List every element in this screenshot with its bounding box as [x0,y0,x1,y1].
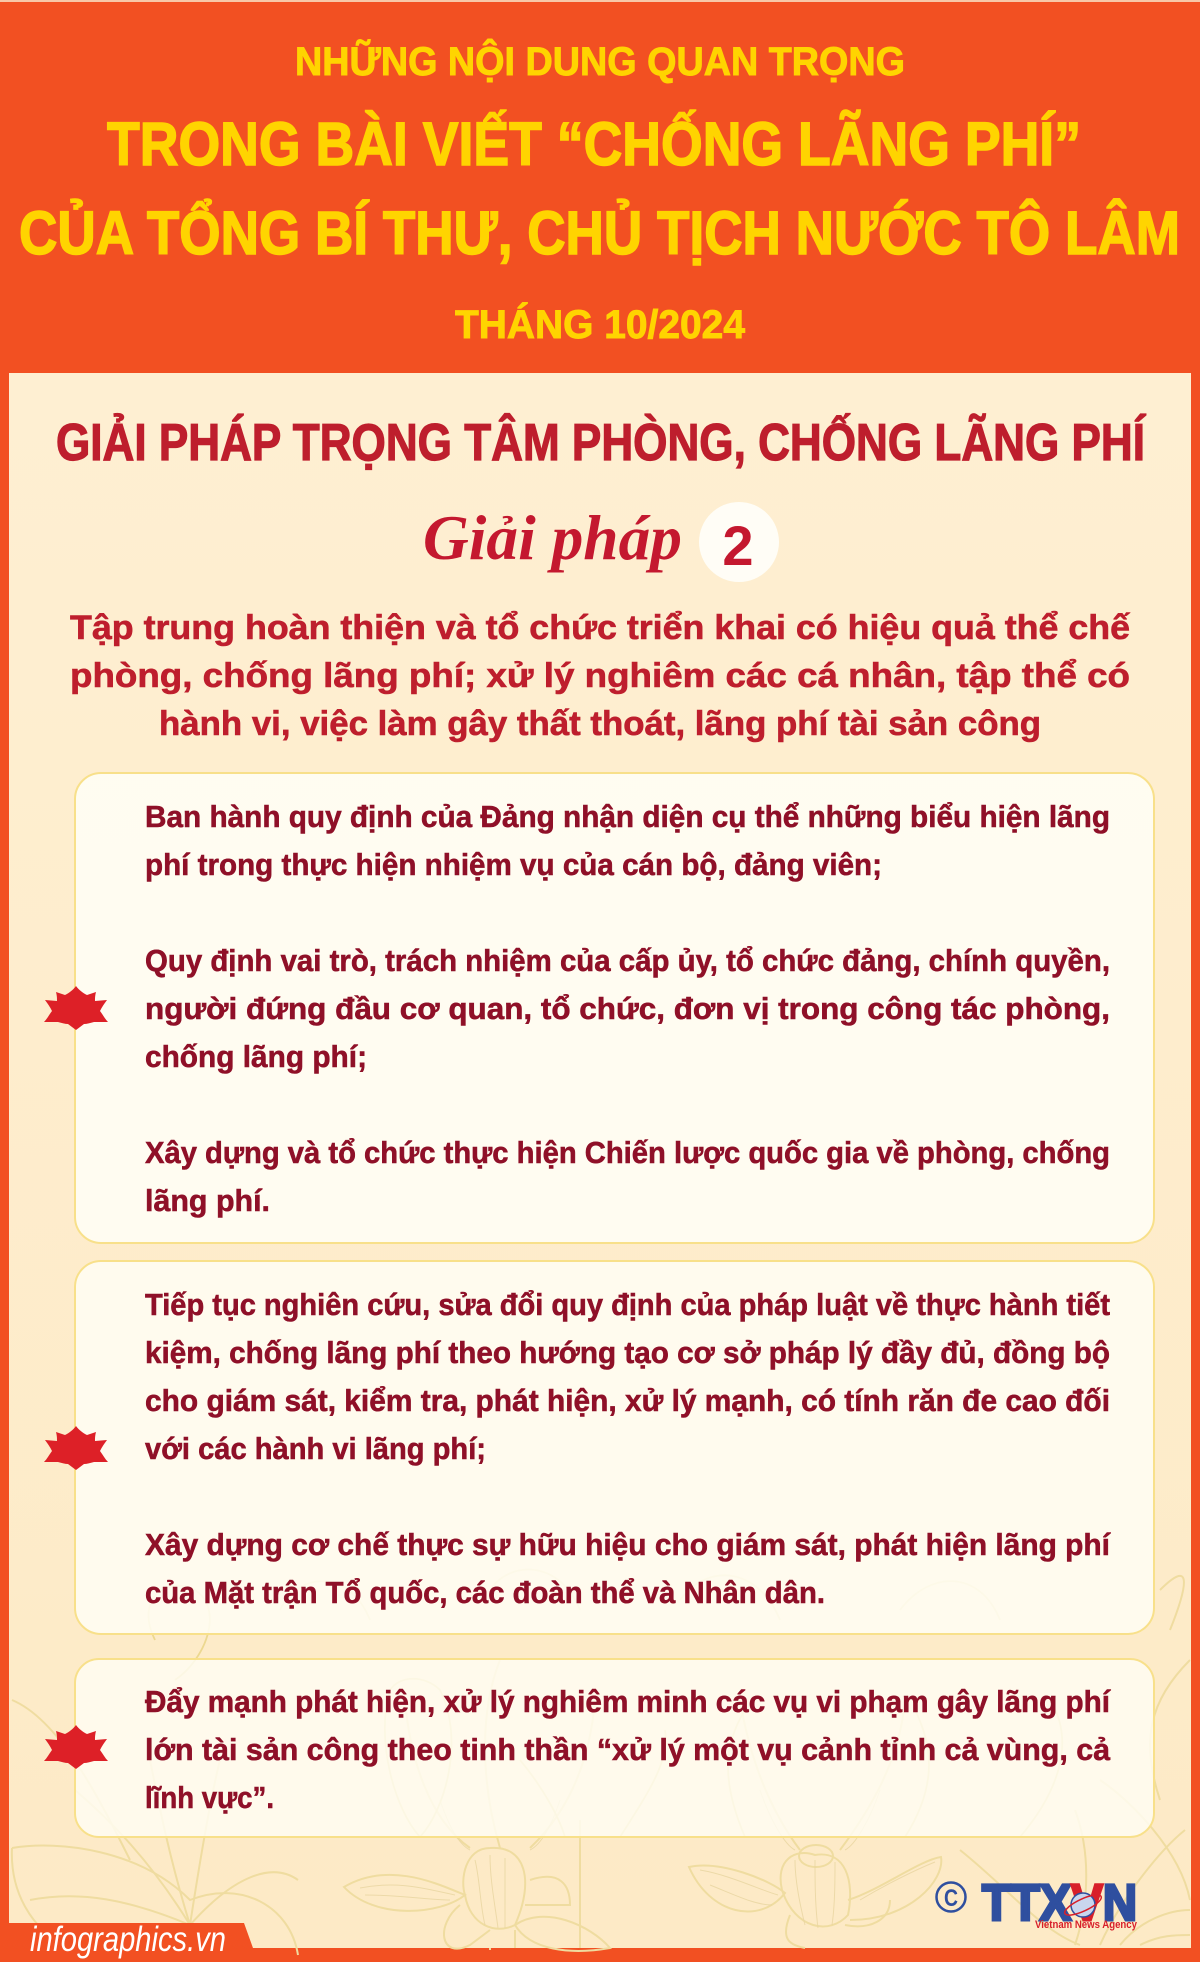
body text: box 1: Xây dựng và tổ chức thực hiện Chiến lược quốc gia về phòng, chống [145,1135,1110,1170]
icon: lotus 1 [44,986,108,1030]
footer tab [0,1920,258,1962]
body text: box 3: Đẩy mạnh phát hiện, xử lý nghiêm minh các vụ vi phạm gây lãng phí [145,1684,1111,1719]
body text: box 1: Ban hành quy định của Đảng nhận diện cụ thể những biểu hiện lãng [145,799,1110,834]
body text: box 1: lãng phí. [145,1183,270,1218]
summary paragraph: Tập trung hoàn thiện và tổ chức triển khai có hiệu quả thể chế [70,609,1130,647]
panel: box 2 [44,1261,1154,1634]
footer text: infographics.vn [30,1920,226,1959]
logo wordmark: TTXVN [982,1874,1137,1931]
body text: box 3 [145,1684,1111,1815]
box 1 bottom edge [100,1242,1130,1244]
body text: box 2 [145,1287,1111,1610]
icon: copyright: C [944,1885,958,1912]
body text: box 3: lĩnh vực”. [145,1780,274,1815]
body text: box 1: chống lãng phí; [145,1039,367,1074]
body text: box 3: lớn tài sản công theo tinh thần “xử lý một vụ cảnh tỉnh cả vùng, cả [145,1732,1111,1767]
body text: box 1: Quy định vai trò, trách nhiệm của cấp ủy, tổ chức đảng, chính quyền, [145,943,1110,978]
panel: cream content area [9,373,1191,1948]
body text: box 2: với các hành vi lãng phí; [145,1431,486,1466]
icon: copyright [936,1882,966,1912]
icon: lotus 3 [44,1725,108,1769]
body text: box 1: phí trong thực hiện nhiệm vụ của cán bộ, đảng viên; [145,847,882,882]
body text: box 2: Xây dựng cơ chế thực sự hữu hiệu cho giám sát, phát hiện lãng phí [145,1527,1111,1562]
icon: lotus 2 [44,1426,108,1470]
logo: TTXVN [936,1874,1138,1931]
solution label with number badge: 2 [722,514,754,577]
background: lotus hatch detail [360,1790,935,1928]
box 3 bottom edge [100,1836,1130,1838]
solution label: Giải pháp [423,502,682,573]
header band [0,0,1200,347]
body text: box 2: cho giám sát, kiểm tra, phát hiện, xử lý mạnh, có tính răn đe cao đối [145,1383,1110,1418]
box 2 bottom edge [100,1633,1130,1635]
body text: box 1 [145,799,1110,1218]
panel: box 3 [44,1659,1154,1837]
number badge [699,502,779,582]
summary paragraph: hành vi, việc làm gây thất thoát, lãng phí tài sản công [159,705,1041,743]
heading: title line 1: TRONG BÀI VIẾT “CHỐNG LÃNG PHÍ” [107,110,1081,178]
background: lotus outlines behind upper boxes [149,1570,1062,1837]
panel: box 1 [44,773,1154,1243]
heading: kicker: NHỮNG NỘI DUNG QUAN TRỌNG [295,38,905,84]
top highlight [0,0,1200,2]
body text: box 2: của Mặt trận Tổ quốc, các đoàn thể và Nhân dân. [145,1575,825,1610]
background: lotus line drawing [12,1576,1190,1955]
summary paragraph [70,609,1130,743]
body text: box 2: kiệm, chống lãng phí theo hướng tạo cơ sở pháp lý đầy đủ, đồng bộ [145,1335,1110,1370]
body text: box 2: Tiếp tục nghiên cứu, sửa đổi quy định của pháp luật về thực hành tiết [145,1287,1110,1322]
heading: date: THÁNG 10/2024 [455,302,746,347]
body text: box 1: người đứng đầu cơ quan, tổ chức, đơn vị trong công tác phòng, [145,991,1110,1026]
logo tagline: Vietnam News Agency [1035,1919,1138,1931]
icon: globe [1062,1891,1104,1919]
solution label with number badge [423,502,779,582]
summary paragraph: phòng, chống lãng phí; xử lý nghiêm các cá nhân, tập thể có [70,657,1130,695]
